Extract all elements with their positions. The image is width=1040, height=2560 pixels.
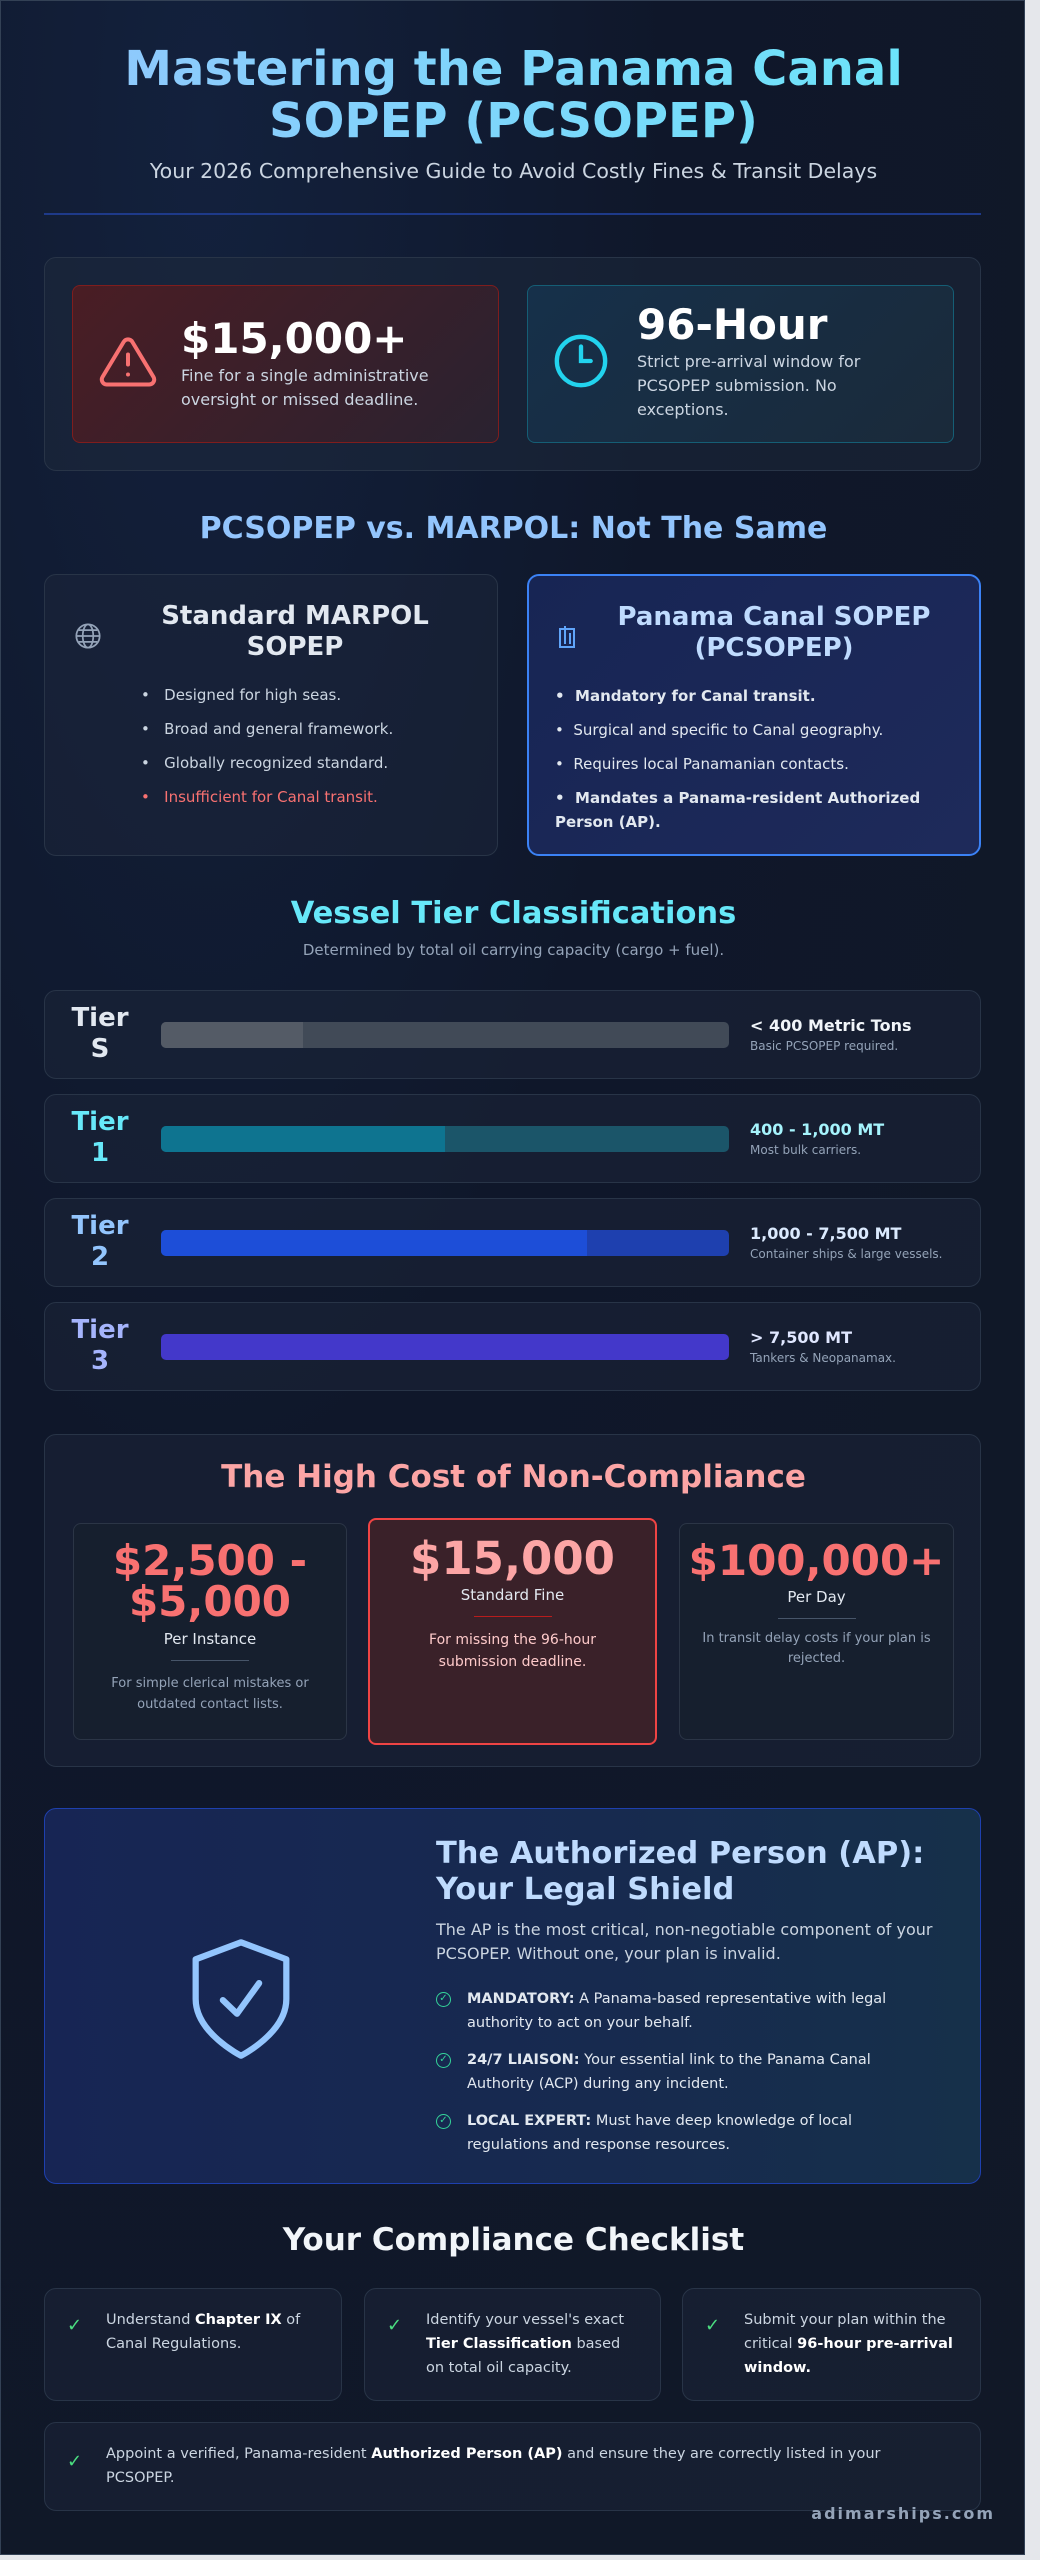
checklist item 3: ✓ [705, 2315, 720, 2336]
checklist item 4: Appoint a verified, Panama-resident Authorized Person (AP) and ensure they are correctly listed in your PCSOPEP. [106, 2446, 881, 2486]
subtitle: tiers: Determined by total oil carrying capacity (cargo + fuel). [303, 941, 724, 959]
panel: key stats [44, 257, 981, 471]
checklist item 2: ✓ [387, 2315, 402, 2336]
heading: vessel tiers: Vessel Tier Classifications [291, 896, 736, 931]
stat card: deadline [527, 285, 954, 443]
card title: SOPEP [247, 632, 343, 662]
AP item list: ✓ [439, 1993, 448, 2004]
cost card: per day: $100,000+ [689, 1536, 944, 1585]
tier row: 2: 1,000 - 7,500 MT [750, 1224, 901, 1243]
icon: globe [75, 624, 100, 648]
checklist item 1: ✓ [67, 2315, 82, 2336]
cost card: per instance: Per Instance [164, 1630, 256, 1648]
panel: MARPOL [44, 574, 498, 856]
card title: Panama Canal SOPEP [618, 602, 930, 632]
AP item list: ✓ [439, 2054, 448, 2065]
cost card: standard fine: For missing the 96-hour submission deadline. [429, 1632, 596, 1670]
heading: The High Cost of Non-Compliance [221, 1459, 806, 1495]
stat description: Fine for a single administrative oversight or missed deadline. [181, 366, 429, 409]
icon: document [559, 626, 575, 648]
cost card: per instance: For simple clerical mistakes or outdated contact lists. [111, 1676, 309, 1712]
AP item list [436, 1991, 886, 2153]
checklist item 3: Submit your plan within the critical 96-hour pre-arrival window. [744, 2312, 953, 2376]
cost card: per day: In transit delay costs if your plan is rejected. [702, 1631, 931, 1666]
tier row: S: < 400 Metric Tons [750, 1016, 912, 1035]
bullet list: • Mandates a Panama-resident Authorized Person (AP). [555, 789, 920, 831]
tier row: 1: Tier [71, 1107, 129, 1137]
bullet list: • Designed for high seas. [141, 686, 341, 704]
checklist item 4 [44, 2422, 981, 2511]
tier row: S: Tier [71, 1003, 129, 1033]
cost card: per instance: $2,500 - [113, 1536, 307, 1585]
icon: warning triangle [100, 337, 156, 386]
AP heading: The Authorized Person (AP): [436, 1836, 924, 1871]
cost card: per instance: $5,000 [129, 1577, 291, 1626]
cost card: standard fine: $15,000 [410, 1532, 615, 1585]
title [1, 43, 1026, 147]
tier row: 3 [44, 1302, 981, 1391]
AP item list: ✓ [439, 2115, 448, 2126]
checklist item 4: ✓ [67, 2451, 82, 2472]
cost card: standard fine [368, 1518, 657, 1745]
cost card: standard fine: Standard Fine [461, 1586, 564, 1604]
bullet list: • Globally recognized standard. [141, 754, 388, 772]
card title [161, 601, 429, 662]
card title [618, 602, 930, 663]
stat card: fine [72, 285, 499, 443]
subtitle: Your 2026 Comprehensive Guide to Avoid Costly Fines & Transit Delays [150, 159, 877, 183]
tier row: 3: > 7,500 MT [750, 1328, 852, 1347]
stat description: Strict pre-arrival window for PCSOPEP submission. No exceptions. [637, 352, 860, 419]
title: SOPEP (PCSOPEP) [269, 93, 758, 149]
bullet list: • Mandatory for Canal transit. [555, 687, 816, 705]
bullet list: • Surgical and specific to Canal geography. [555, 721, 883, 739]
panel: authorized person [44, 1808, 981, 2184]
cost card: per instance [73, 1523, 347, 1740]
card title: Standard MARPOL [161, 601, 429, 631]
checklist item 2 [364, 2288, 661, 2401]
panel: PCSOPEP [527, 574, 981, 856]
icon: clock [554, 334, 608, 388]
title: Mastering the Panama Canal [124, 41, 903, 97]
tier row: 3: Tier [71, 1315, 129, 1345]
tier row: 2: Tier [71, 1211, 129, 1241]
footer brand: adimarships.com [811, 2504, 995, 2523]
tier row: 1: 400 - 1,000 MT [750, 1120, 884, 1139]
AP item list: LOCAL EXPERT: Must have deep knowledge of local regulations and response resources. [467, 2113, 852, 2153]
AP item list: MANDATORY: A Panama-based representative with legal authority to act on your behalf. [467, 1991, 886, 2031]
tier row: 1: 1 [91, 1138, 109, 1168]
bullet list [555, 687, 920, 831]
AP heading [436, 1836, 924, 1907]
icon: shield check [192, 1939, 290, 2059]
tier row: 2: Container ships & large vessels. [750, 1247, 942, 1261]
cost card: per day [679, 1523, 954, 1740]
stat value: 96-Hour [637, 300, 828, 349]
panel: cost of non-compliance [44, 1434, 981, 1767]
tier row: 1 [44, 1094, 981, 1183]
bullet list: • Insufficient for Canal transit. [141, 788, 378, 806]
tier row: 2: 2 [91, 1242, 109, 1272]
tier row: 2 [44, 1198, 981, 1287]
heading: comparison: PCSOPEP vs. MARPOL: Not The Same [200, 511, 827, 546]
tier row: S: S [91, 1034, 109, 1064]
tier row: 3: Tankers & Neopanamax. [750, 1351, 896, 1365]
tier row: 1: Most bulk carriers. [750, 1143, 861, 1157]
bullet list: • Requires local Panamanian contacts. [555, 755, 849, 773]
AP heading: Your Legal Shield [436, 1872, 734, 1907]
bullet list [141, 686, 393, 806]
tier row: 3: 3 [91, 1346, 109, 1376]
tier row: S: Basic PCSOPEP required. [750, 1039, 898, 1053]
checklist item 1: Understand Chapter IX of Canal Regulations. [106, 2312, 300, 2352]
stat value: $15,000+ [181, 314, 408, 363]
tier row: S [44, 990, 981, 1079]
cost card: per day: Per Day [787, 1588, 846, 1606]
card title: (PCSOPEP) [694, 633, 854, 663]
heading: checklist: Your Compliance Checklist [283, 2222, 744, 2258]
AP item list: 24/7 LIAISON: Your essential link to the Panama Canal Authority (ACP) during any incident. [467, 2052, 871, 2092]
checklist item 2: Identify your vessel's exact Tier Classification based on total oil capacity. [426, 2312, 624, 2376]
AP intro: The AP is the most critical, non-negotiable component of your PCSOPEP. Without one, your plan is invalid. [436, 1920, 932, 1963]
checklist item 1 [44, 2288, 342, 2401]
bullet list: • Broad and general framework. [141, 720, 393, 738]
checklist item 3 [682, 2288, 981, 2401]
